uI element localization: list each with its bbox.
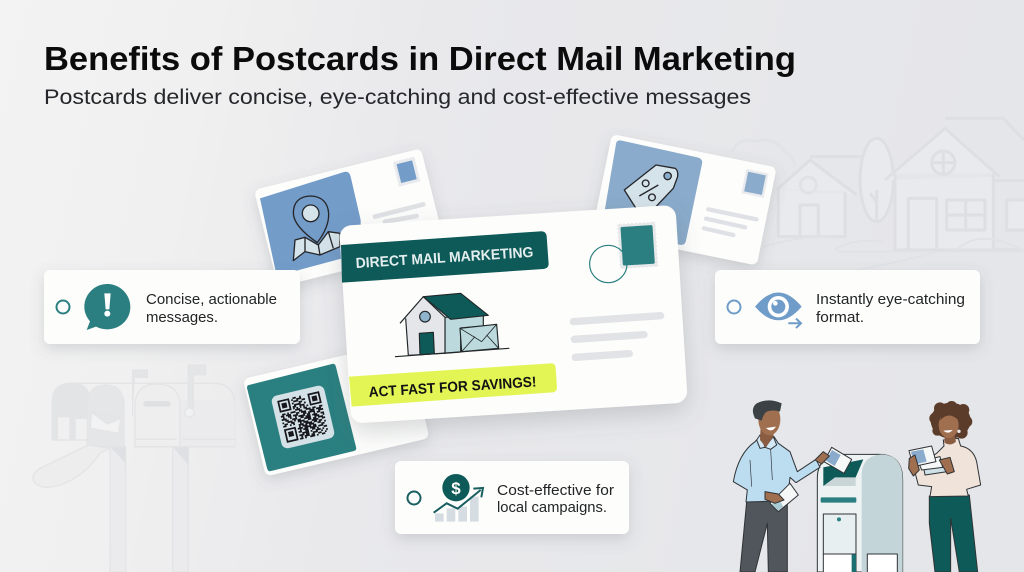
- icon: speech bubble exclamation: [84, 284, 130, 330]
- callout: eye-catching format: [715, 270, 980, 344]
- highlight text: ACT FAST FOR SAVINGS!: [368, 374, 537, 401]
- highlight strip: [349, 363, 557, 407]
- open mailbox: [33, 383, 124, 487]
- bullet: [408, 492, 420, 504]
- postcard: discount tag: [592, 134, 777, 265]
- person: man: [733, 400, 852, 572]
- callout text: format.: [816, 310, 864, 326]
- address lines: [704, 209, 757, 235]
- postcard: map location: [254, 148, 445, 287]
- callout text: Cost-effective for: [497, 483, 614, 499]
- banner: [341, 231, 549, 283]
- title: Benefits of Postcards in Direct Mail Marketing: [44, 41, 796, 78]
- background: faded houses: [732, 118, 1024, 270]
- QR panel: [247, 364, 356, 471]
- dollar sign: $: [451, 479, 461, 498]
- mailbox posts: [110, 447, 188, 572]
- subtitle: Postcards deliver concise, eye-catching and cost-effective messages: [44, 85, 751, 109]
- bullet: [728, 300, 740, 314]
- map panel: [260, 172, 361, 276]
- callout: cost-effective: [395, 461, 629, 534]
- icon: eye with arrow: [755, 292, 802, 328]
- illustration: people at mailbox: [733, 400, 981, 572]
- background: faded mailboxes: [33, 365, 235, 572]
- person: woman: [909, 401, 981, 572]
- callout text: Concise, actionable: [146, 292, 277, 308]
- callout: concise messages: [44, 270, 300, 344]
- bullet: [56, 300, 70, 314]
- callout text: local campaigns.: [497, 500, 607, 516]
- icon: map pin: [293, 196, 340, 261]
- closed mailbox: [73, 365, 235, 447]
- icon: price tag: [624, 165, 678, 220]
- main postcard: [339, 205, 688, 424]
- callout text: Instantly eye-catching: [816, 292, 965, 308]
- postmark circle: [590, 245, 627, 283]
- icon: dollar with rising chart: [434, 474, 483, 522]
- icon: house with envelope: [395, 293, 509, 357]
- stamp: [741, 169, 769, 198]
- mailbox: [817, 454, 903, 572]
- photo panel: [602, 140, 702, 245]
- stamp: [393, 156, 421, 187]
- address lines: [375, 204, 423, 222]
- QR code: [271, 385, 335, 449]
- callout text: messages.: [146, 310, 218, 326]
- stamp: [617, 221, 658, 269]
- postcard: QR code: [243, 341, 429, 476]
- address lines: [573, 316, 661, 357]
- banner text: DIRECT MAIL MARKETING: [355, 245, 534, 272]
